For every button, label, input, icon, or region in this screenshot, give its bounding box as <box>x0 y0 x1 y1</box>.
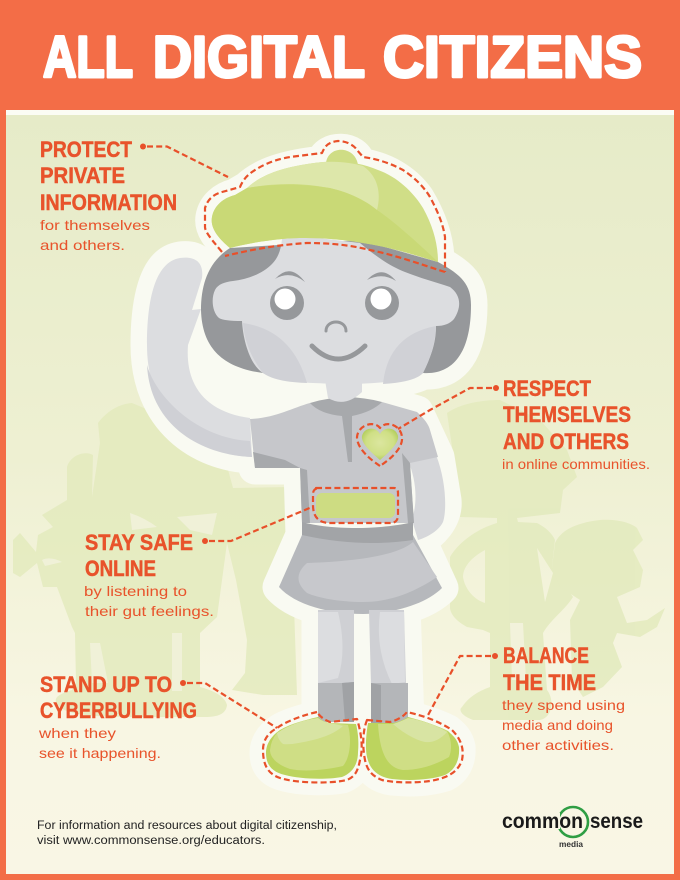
eyebrows <box>275 271 396 282</box>
shoes <box>266 717 459 780</box>
logo: common sense media: common <box>502 810 583 833</box>
eyes <box>270 286 399 320</box>
title: ALL <box>43 25 133 90</box>
belt <box>302 522 413 543</box>
character <box>147 150 471 780</box>
footer text: For information and resources about digital citizenship, <box>37 820 337 832</box>
face <box>213 237 459 384</box>
smile <box>312 346 365 359</box>
callout lines <box>140 141 499 782</box>
text: respect: RESPECT <box>503 376 591 401</box>
text: protect: PROTECT <box>40 137 132 162</box>
text: respect: in online communities. <box>502 456 650 472</box>
logo: common sense media: media <box>559 840 584 849</box>
legs <box>318 610 408 723</box>
silhouettes: left group <box>13 403 297 717</box>
line: respect <box>357 385 499 466</box>
text: stay safe: their gut feelings. <box>85 603 214 619</box>
text: stay safe: STAY SAFE <box>85 530 193 555</box>
footer text: visit www.commonsense.org/educators. <box>37 835 265 847</box>
line: stay safe <box>202 488 398 544</box>
text: protect: and others. <box>40 237 125 253</box>
shirt <box>250 397 438 523</box>
line: balance <box>363 653 498 782</box>
text: respect: AND OTHERS <box>503 429 629 454</box>
text: stand up: CYBERBULLYING <box>40 698 197 723</box>
text: balance: media and doing <box>502 717 613 733</box>
text: protect: INFORMATION <box>40 190 177 215</box>
hat <box>212 150 438 262</box>
neck <box>325 380 362 402</box>
text: stand up: STAND UP TO <box>40 672 172 697</box>
text: protect: PRIVATE <box>40 163 125 188</box>
hair <box>201 240 471 383</box>
cheeks <box>243 323 436 384</box>
silhouette gap: right group <box>510 623 526 680</box>
text: respect: THEMSELVES <box>503 402 631 427</box>
footer text <box>37 820 337 847</box>
silhouettes: right group <box>447 400 665 720</box>
text: protect: for themselves <box>40 217 150 233</box>
text: stay safe: ONLINE <box>85 556 156 581</box>
title: DIGITAL <box>153 25 365 90</box>
title: CITIZENS <box>383 25 642 90</box>
logo: common sense media <box>502 807 643 849</box>
text: balance <box>502 643 625 753</box>
silhouette gaps: left group <box>42 513 217 691</box>
skirt <box>279 535 442 614</box>
arm <box>147 258 252 457</box>
text: stay safe: by listening to <box>84 583 187 599</box>
belly pocket <box>316 493 395 518</box>
text: protect <box>40 137 177 253</box>
line: stand up <box>180 680 362 782</box>
text: balance: BALANCE <box>503 643 589 668</box>
text: balance: other activities. <box>502 737 614 753</box>
heart <box>362 429 398 460</box>
back arm <box>408 455 445 540</box>
text: stay safe <box>84 530 214 619</box>
logo: common sense media: sense <box>590 810 643 833</box>
text: stand up: see it happening. <box>39 745 161 761</box>
character halo <box>147 150 471 780</box>
text: balance: they spend using <box>502 697 625 713</box>
nose <box>326 322 346 331</box>
text: stand up <box>38 672 197 761</box>
text: balance: THE TIME <box>503 670 596 695</box>
text: stand up: when they <box>38 725 116 741</box>
title <box>43 25 642 90</box>
line: protect <box>140 141 445 272</box>
text: respect <box>502 376 650 472</box>
